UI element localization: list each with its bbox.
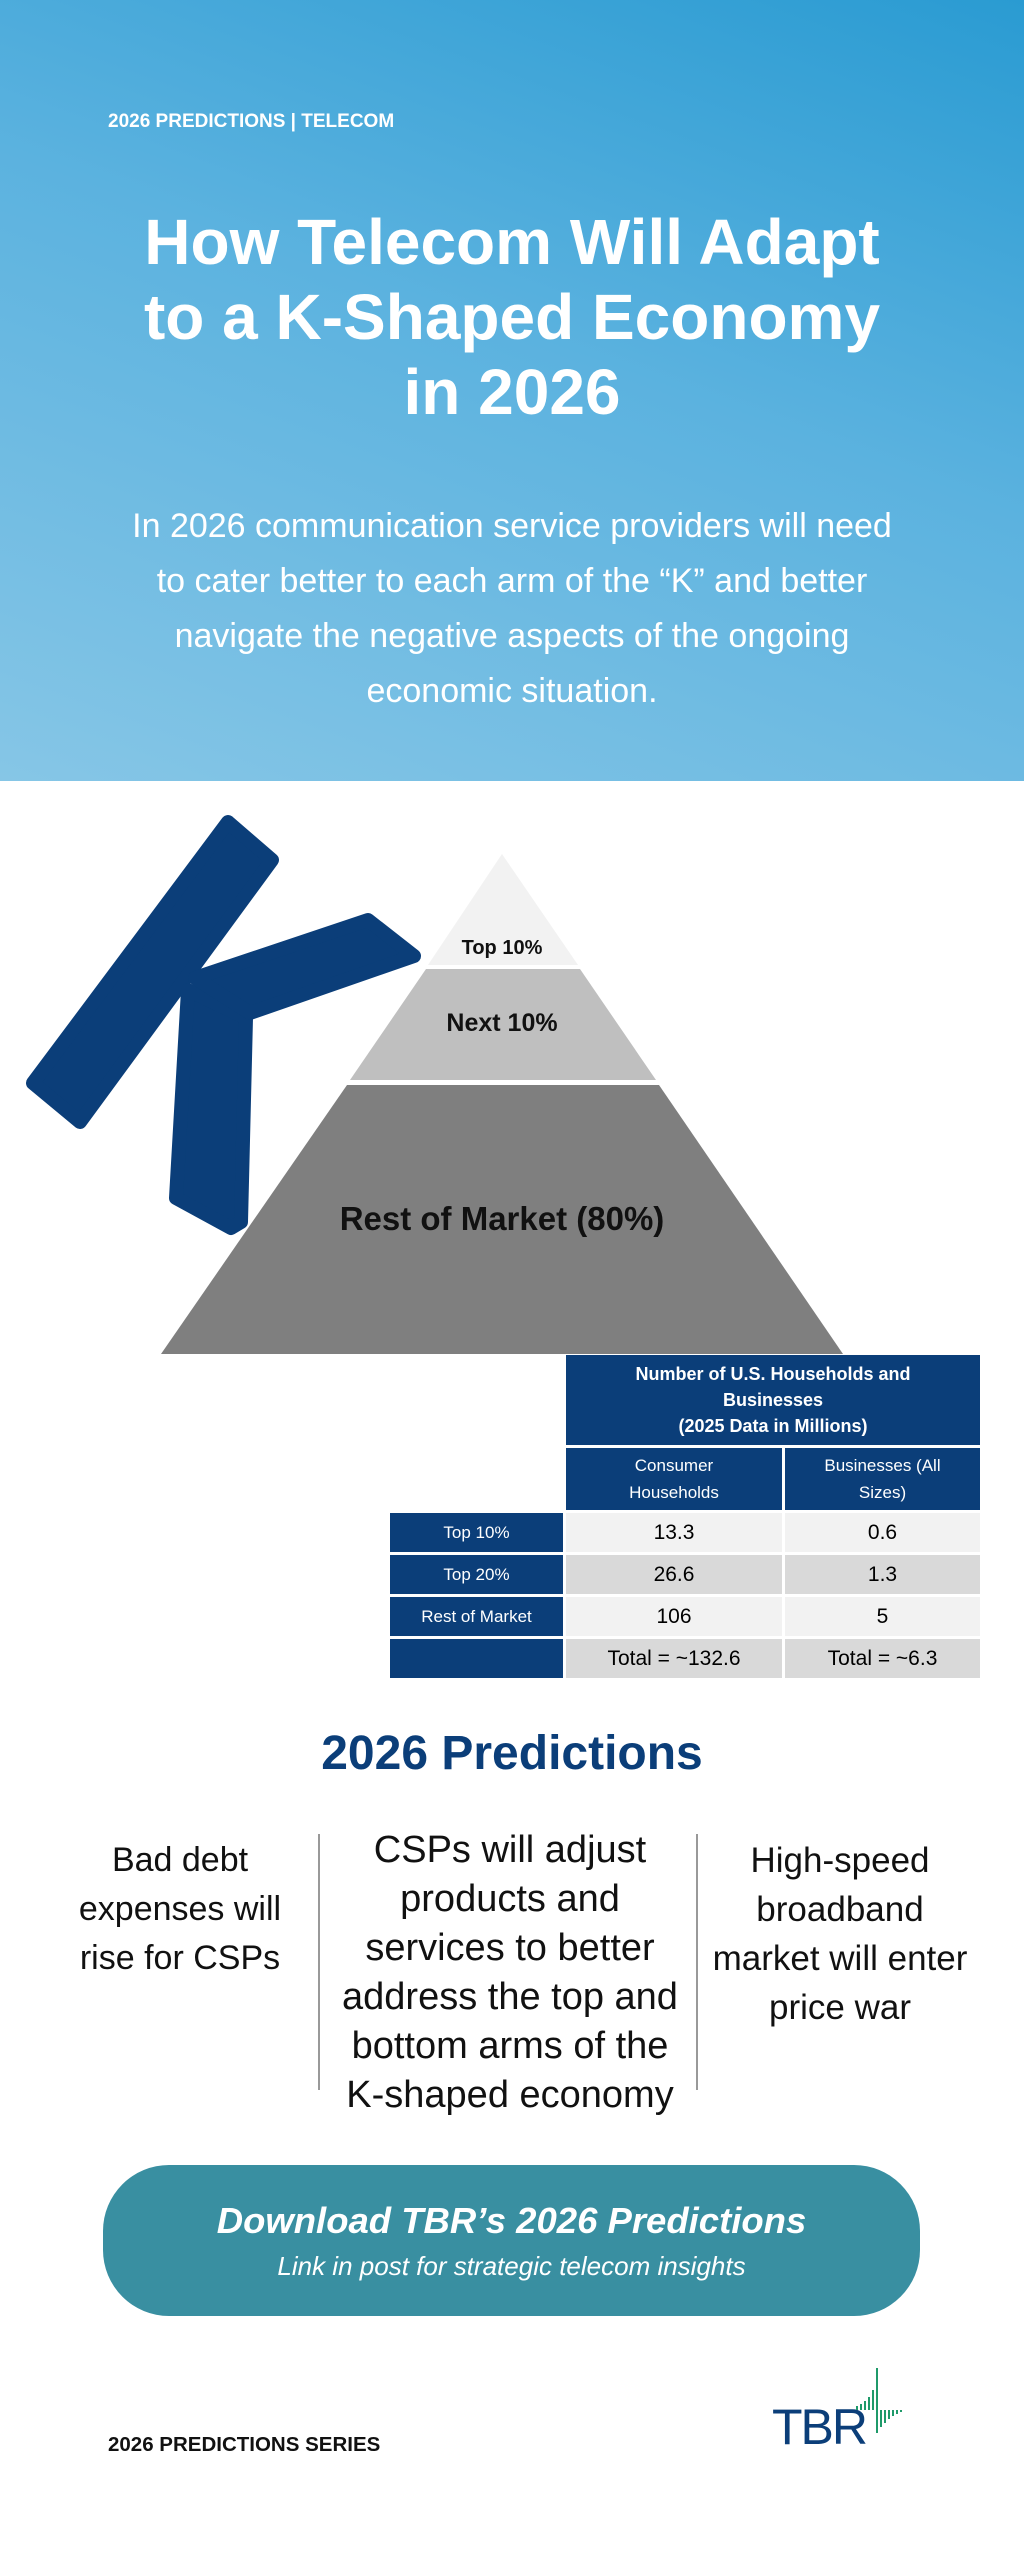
data table: 1.3 (868, 1562, 897, 1586)
pyramid (161, 854, 843, 1354)
prediction 2: address the top and (342, 1976, 678, 2018)
data table: 0.6 (868, 1520, 897, 1544)
title: to a K-Shaped Economy (144, 281, 880, 353)
data table: 13.3 (654, 1520, 694, 1544)
prediction 1 (79, 1841, 281, 1977)
data table: 26.6 (654, 1562, 694, 1586)
prediction 2: services to better (365, 1927, 655, 1969)
title: in 2026 (403, 356, 621, 428)
logo: TBR: TBR (772, 2399, 866, 2455)
data table: (2025 Data in Millions) (678, 1416, 868, 1436)
data table: 106 (656, 1604, 692, 1628)
intro text: In 2026 communication service providers will need (132, 507, 892, 545)
prediction 3: market will enter (713, 1939, 967, 1978)
CTA headline: Download TBR’s 2026 Predictions (217, 2200, 806, 2241)
prediction 1: expenses will (79, 1890, 281, 1928)
prediction 2 (342, 1829, 678, 2116)
data table: Total = ~6.3 (828, 1646, 937, 1670)
data table: Total = ~132.6 (607, 1646, 741, 1670)
data table: Top 20% (443, 1564, 510, 1584)
data table (390, 1355, 980, 1678)
prediction 1: Bad debt (112, 1841, 248, 1879)
prediction 2: bottom arms of the (352, 2025, 668, 2067)
data table: Number of U.S. Households and (635, 1364, 911, 1384)
prediction 3 (713, 1841, 967, 2027)
footer label: 2026 PREDICTIONS SERIES (108, 2433, 380, 2456)
data table: Businesses (All (824, 1456, 941, 1475)
CTA subtext: Link in post for strategic telecom insights (277, 2251, 746, 2281)
prediction 2: products and (400, 1878, 620, 1920)
data table: Households (629, 1483, 719, 1502)
predictions heading: 2026 Predictions (321, 1727, 703, 1780)
logo: TBR (772, 2368, 902, 2455)
data table: Sizes) (859, 1483, 906, 1502)
prediction 3: broadband (756, 1890, 924, 1929)
data table: Consumer (635, 1456, 713, 1475)
data table: Top 10% (443, 1522, 510, 1542)
intro text: navigate the negative aspects of the ongoing (175, 617, 849, 655)
K and pyramid graphic (26, 815, 843, 1354)
data table: Businesses (723, 1390, 823, 1410)
pyramid: Next 10% (446, 1009, 558, 1037)
intro text: to cater better to each arm of the “K” and better (157, 562, 867, 600)
prediction 3: price war (769, 1988, 911, 2027)
prediction 1: rise for CSPs (80, 1939, 280, 1977)
CTA button (103, 2165, 920, 2316)
prediction 3: High-speed (750, 1841, 930, 1880)
intro text (132, 507, 892, 710)
title (144, 206, 880, 428)
pyramid: Top 10% (462, 937, 543, 959)
prediction 2: CSPs will adjust (374, 1829, 646, 1871)
header band (0, 0, 1024, 781)
intro text: economic situation. (366, 672, 658, 710)
title: How Telecom Will Adapt (144, 206, 880, 278)
pyramid: Rest of Market (80%) (340, 1200, 664, 1237)
icon: K letter (33, 822, 414, 1228)
kicker: 2026 PREDICTIONS | TELECOM (108, 111, 394, 132)
data table: 5 (877, 1604, 888, 1628)
data table: Rest of Market (421, 1606, 532, 1626)
prediction 2: K-shaped economy (346, 2074, 674, 2116)
